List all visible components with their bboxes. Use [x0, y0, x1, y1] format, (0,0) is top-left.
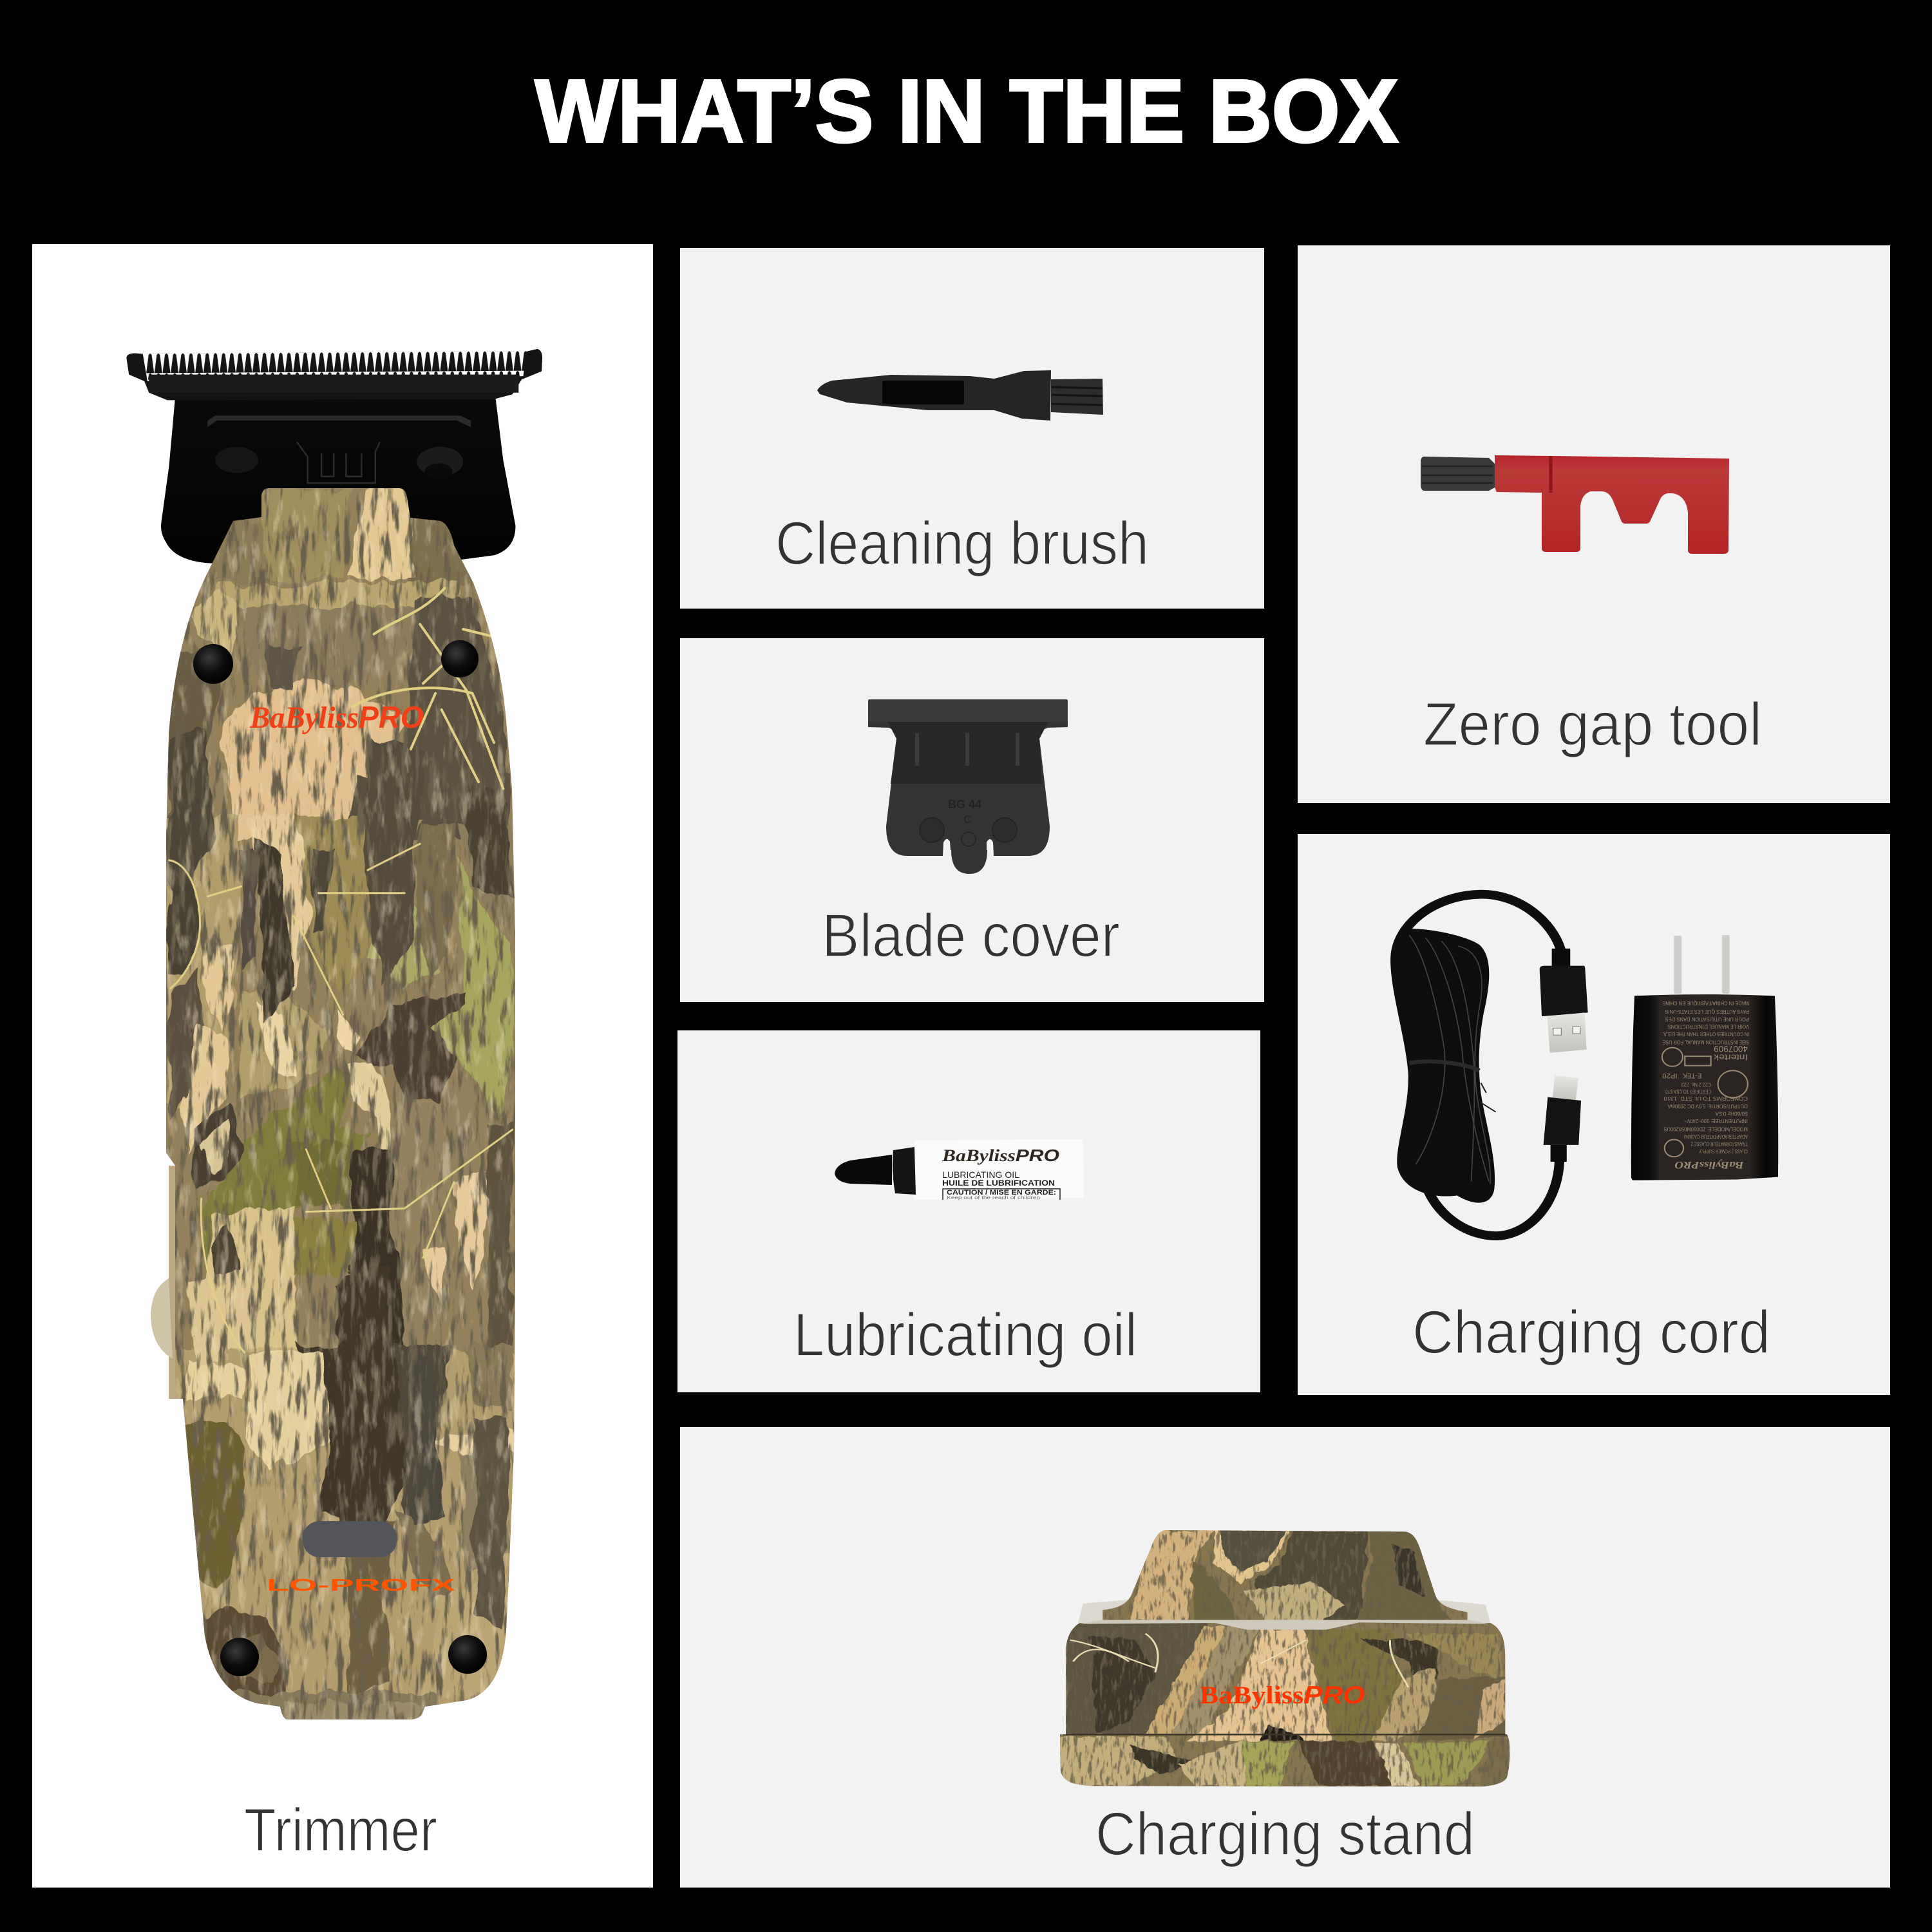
icon: USB charging cable: [1394, 895, 1561, 1236]
icon: wall adapter: MODEL/MODELE: ZD010M050200US: [1663, 1126, 1748, 1132]
icon: wall adapter: Intertek: [1714, 1053, 1748, 1062]
icon: wall adapter: VOIR LE MANUEL D'INSTRUCTIONS: [1667, 1024, 1749, 1030]
icon: wall adapter: 4007909: [1714, 1043, 1748, 1053]
trimmer model mark: LO-PROFX: [267, 1575, 456, 1595]
label: charging cord: Charging cord: [1412, 1298, 1770, 1367]
icon: wall adapter: IN COUNTRIES OTHER THAN THE U.S.A.: [1662, 1031, 1749, 1037]
icon: camouflage charging stand: [1057, 1528, 1517, 1788]
icon: lubricating oil bottle: CAUTION / MISE EN GARDE:: [947, 1189, 1056, 1197]
icon: USB-C plug: [1544, 1075, 1581, 1162]
icon: blade cover: BG 44: [948, 798, 981, 811]
icon: bottom right screw: [448, 1635, 487, 1674]
icon: wall adapter: INPUT/ENTREE: 100~240V~: [1684, 1118, 1748, 1124]
label: blade cover: Blade cover: [822, 902, 1120, 970]
icon: wall adapter: ADAPTER/ADAPTATEUR CA188M: [1684, 1133, 1748, 1139]
panel: trimmer: [32, 244, 653, 1888]
icon: camouflage trimmer body: [155, 477, 528, 1732]
panel: lubricating oil: [677, 1030, 1260, 1392]
icon: USB-A plug: [1540, 949, 1588, 1053]
icon: wall adapter: MADE IN CHINA/FABRIQUE EN CHINE: [1662, 1000, 1749, 1007]
label: zero gap tool: Zero gap tool: [1423, 690, 1762, 759]
icon: lubricating oil bottle: LUBRICATING OIL: [942, 1170, 1019, 1180]
panel: charging cord: [1298, 834, 1890, 1395]
icon: zero gap tool: [1421, 455, 1729, 554]
icon: bottom left screw: [220, 1638, 259, 1676]
icon: wall adapter: CLASS 2 POWER SUPPLY: [1699, 1148, 1748, 1154]
icon: wall adapter: 50/60Hz 0.5A: [1715, 1111, 1748, 1117]
icon: wall adapter: OUTPUT/SORTIE: 5.0V DC 2000mA: [1667, 1103, 1748, 1110]
extra bark streaks: [169, 727, 511, 1627]
icon: wall adapter: POUR UNE UTILISATION DANS DES: [1665, 1016, 1749, 1023]
icon: black T-blade: [126, 349, 542, 564]
label: cleaning brush: Cleaning brush: [775, 509, 1149, 578]
icon: top right screw: [441, 640, 478, 677]
icon: camouflage charging stand: BaBylissPRO: [1200, 1680, 1365, 1709]
icon: wall adapter: C22.2 No. 223: [1681, 1082, 1711, 1088]
panel: blade cover: [680, 638, 1264, 1002]
icon: blade cover: C: [963, 813, 971, 826]
title: WHAT’S IN THE BOX: [535, 62, 1398, 161]
label: charging stand: Charging stand: [1095, 1800, 1475, 1868]
panel: charging stand: [680, 1427, 1890, 1888]
icon: lubricating oil bottle: BaByliss PRO: [942, 1146, 1059, 1165]
icon: wall adapter: TRANSFORMATEUR CLASSE 2: [1690, 1141, 1748, 1147]
label: trimmer: Trimmer: [244, 1796, 437, 1864]
panel: zero gap tool: [1298, 245, 1890, 803]
icon: blade cover: [868, 699, 1068, 874]
icon: side switch: [151, 1166, 187, 1399]
panel: cleaning brush: [680, 248, 1264, 609]
icon: top left screw: [193, 644, 233, 684]
icon: lubricating oil bottle: Keep out of the reach of children: [947, 1196, 1040, 1200]
icon: wall adapter: [1631, 935, 1778, 1180]
icon: wall adapter: PAYS AUTRES QUE LES ETATS-UNIS: [1665, 1009, 1749, 1014]
icon: cleaning brush: [817, 370, 1103, 421]
icon: wall adapter: SEE INSTRUCTION MANUAL FOR USE: [1662, 1039, 1749, 1045]
icon: wall adapter: E-TEK: [1682, 1072, 1701, 1079]
icon: wall adapter: CONFORMS TO UL STD. 1310: [1663, 1095, 1748, 1102]
icon: wall adapter: BaBylissPRO: [1674, 1159, 1745, 1170]
icon: wall adapter: CERTIFIED TO CSA STD.: [1663, 1088, 1711, 1095]
icon: charging indicator: [303, 1521, 397, 1557]
icon: lubricating oil bottle: [835, 1139, 1084, 1200]
trimmer logo: BaBylissPRO: [249, 701, 424, 735]
bark texture: [155, 477, 528, 1732]
icon: lubricating oil bottle: HUILE DE LUBRIFICATION: [942, 1179, 1055, 1188]
icon: wall adapter: IP20: [1662, 1072, 1677, 1080]
label: lubricating oil: Lubricating oil: [793, 1301, 1137, 1369]
